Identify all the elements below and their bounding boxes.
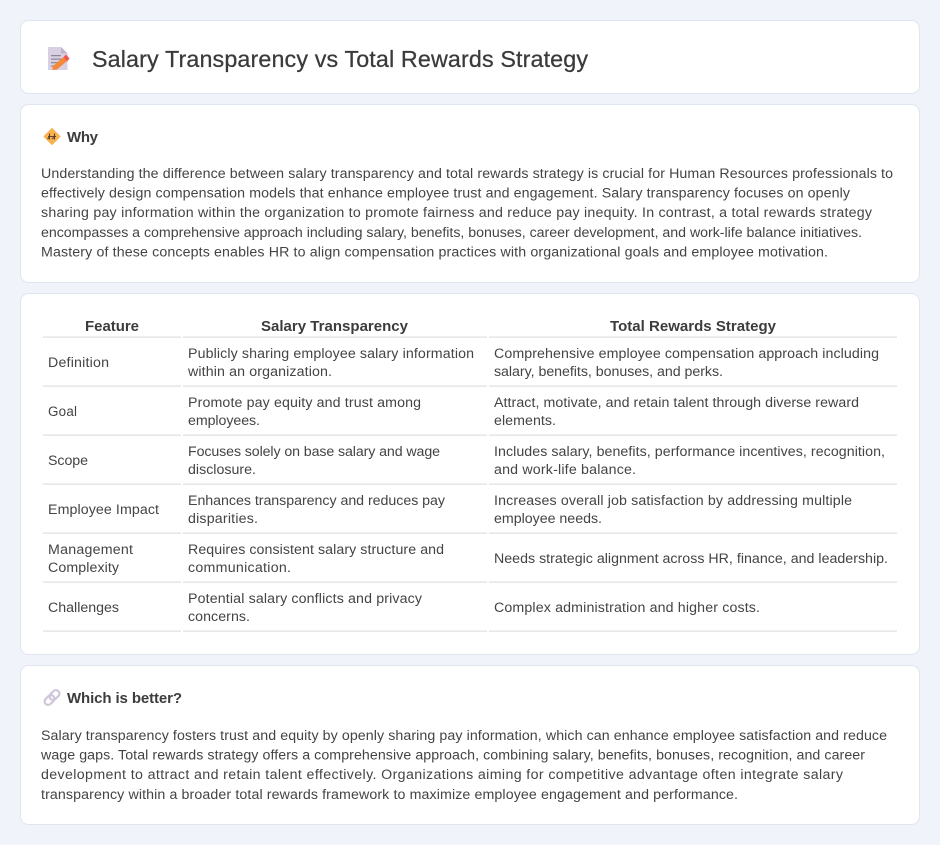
row: employee impact: Employee Impact (48, 502, 159, 518)
row: definition: within an organization. (187, 364, 332, 380)
heading: which is better: Which is better? (67, 690, 182, 707)
row: goal: Goal (48, 404, 77, 419)
row: definition: salary, benefits, bonuses, and perks. (494, 364, 723, 380)
row: goal (43, 395, 897, 436)
table header: Salary Transparency (261, 318, 409, 335)
text block: which is better (40, 728, 887, 803)
text block: why: effectively design compensation models that enhance employee trust and engagement. Salary transparency focuses on openly (41, 186, 851, 202)
heading: why: Why (67, 129, 99, 146)
text block: why: encompasses a comprehensive approach including salary, benefits, bonuses, career development, and work-life balance initiatives. (41, 225, 862, 241)
text block: which is better: transparency within a broader total rewards framework to maximize employee engagement and performance. (41, 787, 738, 803)
text block: which is better: development to attract and retain talent effectively. Organizations aiming for competitive advantage often integrate salary (41, 767, 844, 783)
text block: why: Mastery of these concepts enables HR to align compensation practices with organizational goals and employee motivation. (41, 244, 828, 260)
row: employee impact (43, 493, 897, 534)
row: goal: employees. (188, 413, 260, 429)
row: challenges: Complex administration and higher costs. (494, 600, 760, 616)
row: scope: disclosure. (188, 462, 256, 478)
row: challenges: concerns. (188, 609, 250, 625)
row: challenges (43, 591, 897, 632)
text block: why: sharing pay information within the organization to promote fairness and reduce pay inequity. In contrast, a total rewards strategy (41, 205, 873, 221)
row: scope: and work-life balance. (494, 462, 636, 478)
row: definition: Comprehensive employee compensation approach including (494, 346, 879, 362)
title: Salary Transparency vs Total Rewards Strategy (92, 46, 588, 72)
icon: warning diamond (44, 128, 60, 144)
table header: Total Rewards Strategy (610, 318, 777, 335)
row: goal: Attract, motivate, and retain talent through diverse reward (494, 395, 859, 411)
row: definition: Definition (48, 355, 109, 371)
table header: Feature (85, 318, 139, 335)
row: goal: Promote pay equity and trust among (188, 395, 421, 411)
row: management complexity: Requires consistent salary structure and (188, 542, 444, 558)
text block: which is better: Salary transparency fosters trust and equity by openly sharing pay information, which can enhance employee satisfaction and reduce (41, 728, 887, 744)
row: goal: elements. (494, 413, 556, 429)
row: management complexity: communication. (188, 560, 291, 576)
row: employee impact: Enhances transparency and reduces pay (188, 493, 446, 509)
text block: why (41, 166, 893, 260)
row: definition (43, 346, 897, 387)
row: scope (43, 444, 897, 485)
row: management complexity: Needs strategic alignment across HR, finance, and leadership. (494, 551, 888, 567)
row: scope: Focuses solely on base salary and wage (188, 444, 440, 460)
row: employee impact: disparities. (188, 511, 258, 527)
row: employee impact: employee needs. (494, 511, 602, 527)
text block: which is better: wage gaps. Total rewards strategy offers a comprehensive approach, combining salary, benefits, bonuses, recognition, and career (40, 748, 865, 764)
panel: comparison table (20, 294, 920, 654)
row: challenges: Challenges (48, 600, 119, 616)
row: management complexity (43, 542, 897, 583)
row: management complexity: Management (48, 542, 133, 558)
panel: title header (20, 20, 920, 94)
panel: why (20, 104, 920, 282)
row: challenges: Potential salary conflicts and privacy (188, 591, 423, 607)
table header (43, 318, 897, 338)
icon: document with pencil (48, 47, 70, 70)
icon: link (43, 689, 61, 706)
row: scope: Scope (48, 453, 88, 469)
row: scope: Includes salary, benefits, performance incentives, recognition, (494, 444, 885, 460)
row: management complexity: Complexity (48, 560, 120, 576)
row: employee impact: Increases overall job satisfaction by addressing multiple (494, 493, 852, 509)
panel: which is better (20, 666, 920, 824)
text block: why: Understanding the difference between salary transparency and total rewards strategy is crucial for Human Resources professionals to (41, 166, 893, 182)
row: definition: Publicly sharing employee salary information (188, 346, 474, 362)
